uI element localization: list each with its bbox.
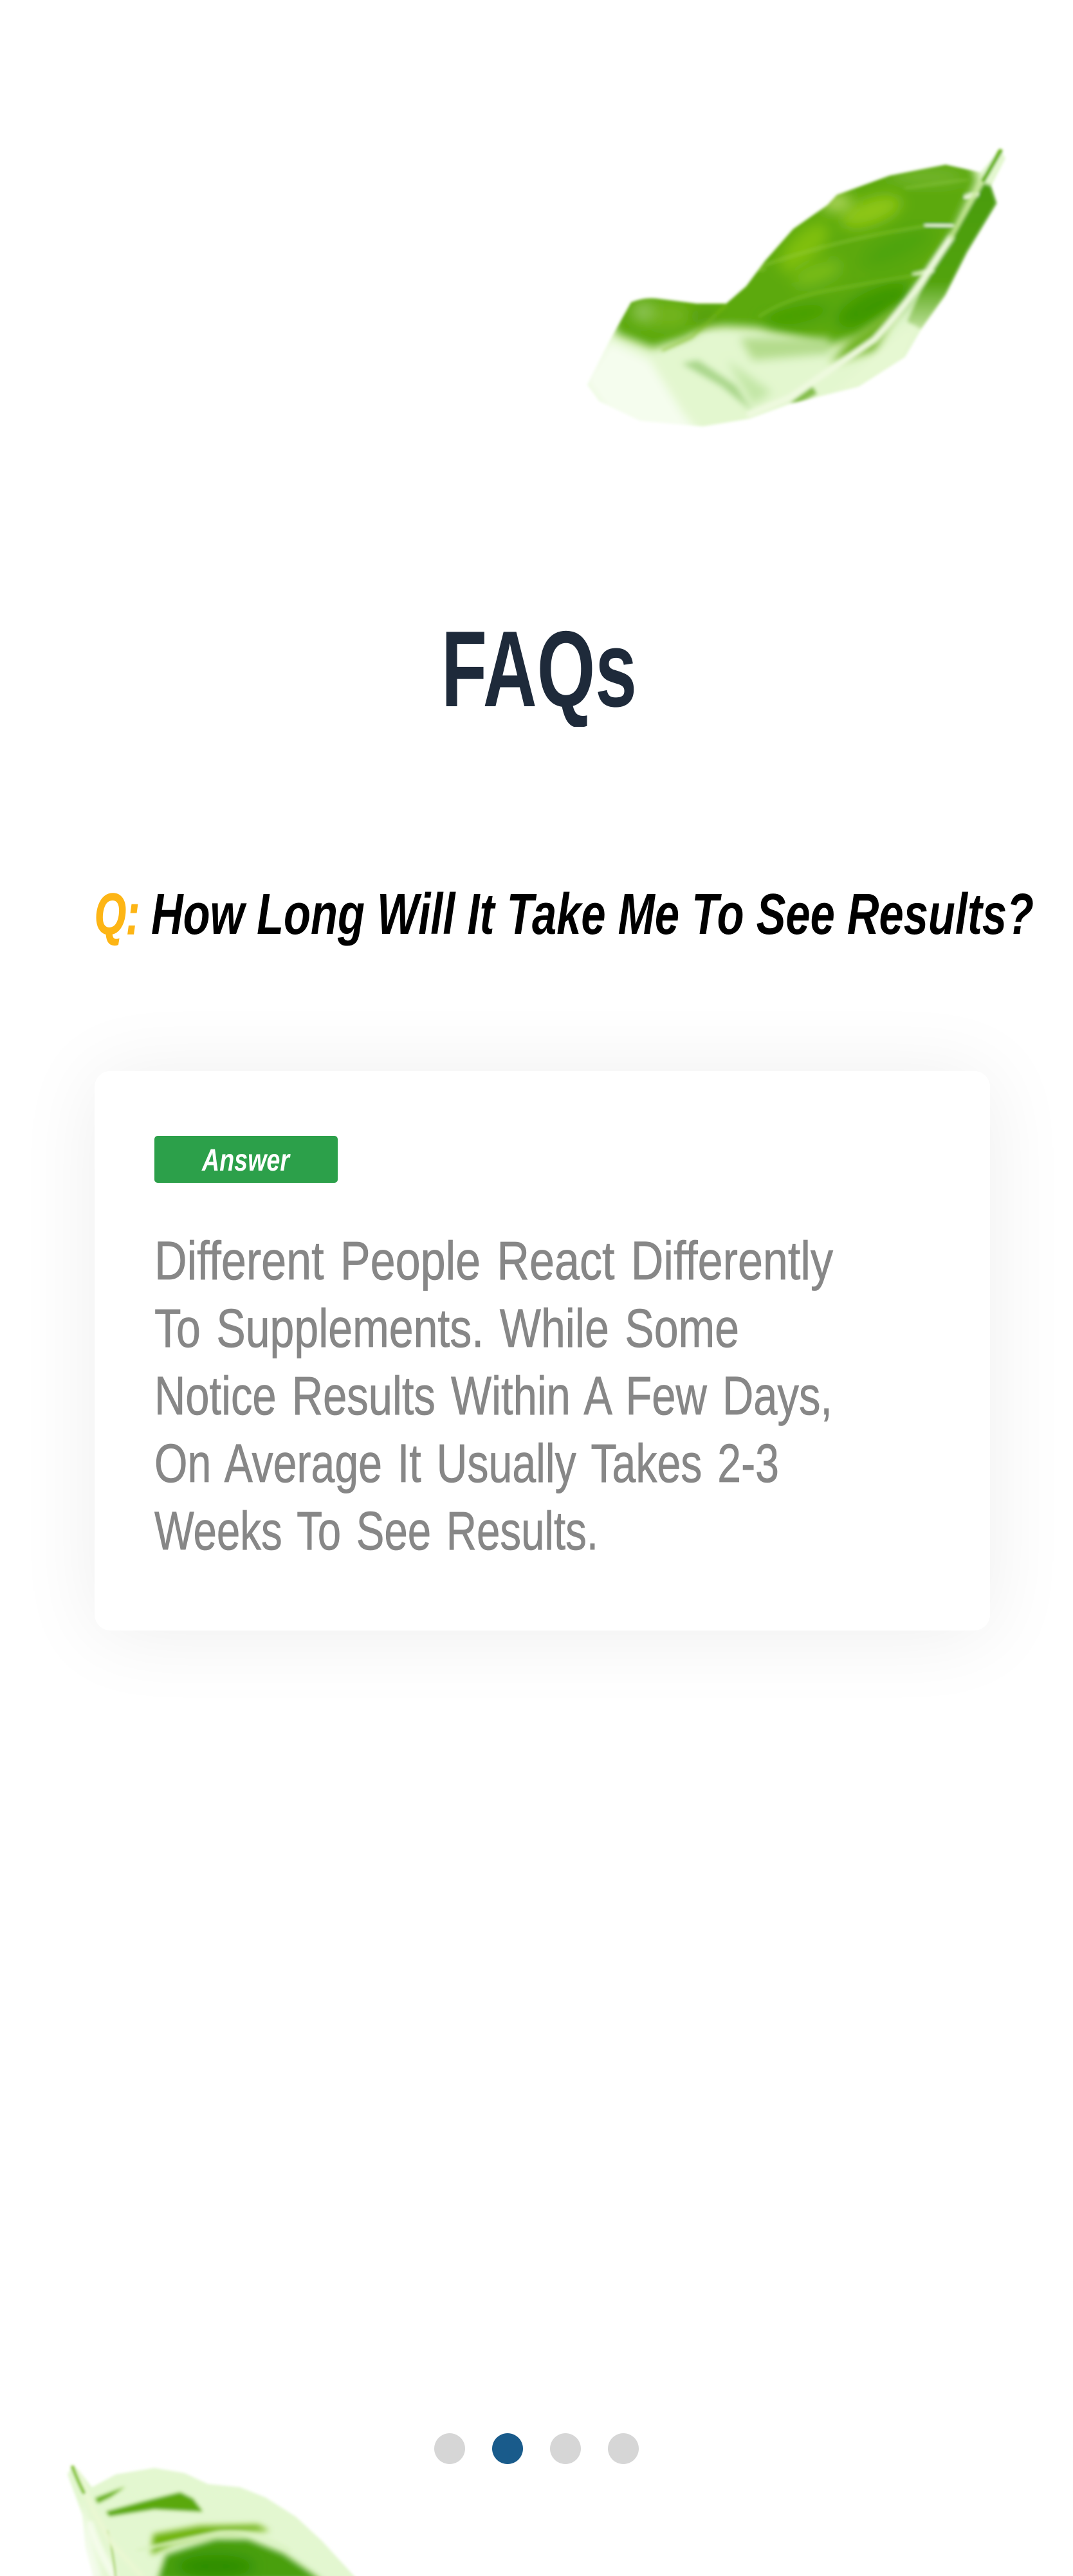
pagination dots <box>434 2433 639 2464</box>
answer badge <box>154 1136 338 1183</box>
answer text: Weeks To See Results. <box>154 1501 598 1561</box>
icon: basil leaf top right <box>587 147 1006 427</box>
panel: answer card <box>95 1071 990 1631</box>
question heading: Q: <box>95 882 140 947</box>
answer text: To Supplements. While Some <box>154 1298 739 1358</box>
answer text <box>154 1230 834 1561</box>
icon: basil leaf bottom left <box>67 2463 355 2576</box>
answer badge: Answer <box>201 1144 291 1178</box>
